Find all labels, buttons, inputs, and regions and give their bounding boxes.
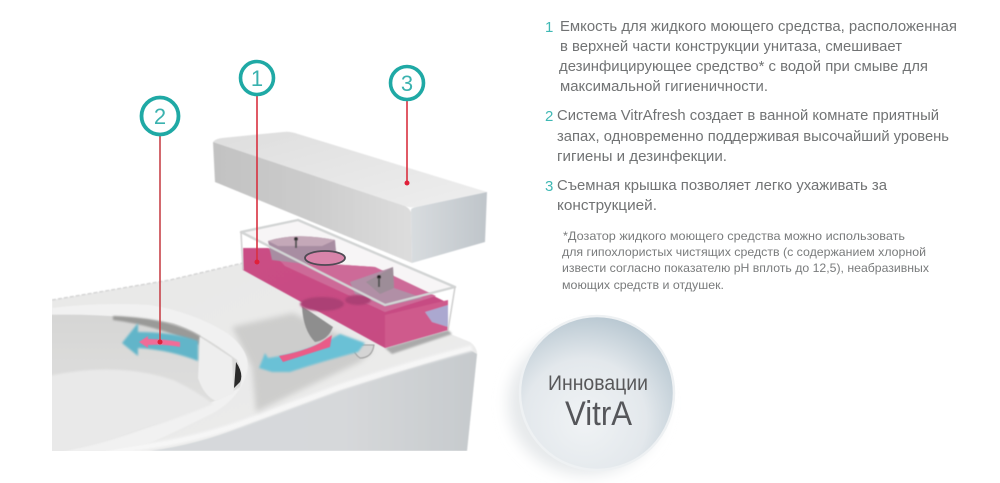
flush recess (232, 313, 373, 412)
item 3 text: Съемная крышка позволяет легко ухаживать за (557, 178, 888, 194)
callout 1 (240, 62, 274, 264)
glass tank (241, 220, 455, 354)
right pink arrow (279, 335, 332, 362)
item 2 text (545, 108, 949, 165)
rim shadow (113, 316, 200, 345)
item 1 text: максимальной гигиеничности. (560, 79, 768, 95)
badge: Инновации VitrA (508, 316, 674, 475)
pink liquid (243, 248, 448, 348)
funnel (302, 306, 333, 342)
item 3 text: 3 (545, 178, 553, 195)
badge shadow (508, 331, 664, 475)
toilet bowl (52, 314, 242, 402)
footnote: для гипохлористых чистящих средств (с содержанием хлорной (562, 245, 926, 259)
outlet pipe (352, 345, 374, 358)
right blue arrow (259, 334, 365, 372)
callout 2 (142, 98, 178, 344)
toilet body (52, 263, 477, 451)
black gap (234, 362, 241, 388)
lid front (213, 142, 412, 263)
callout 3: 3 (401, 71, 413, 96)
badge disc (520, 316, 674, 470)
white flush block (198, 337, 234, 401)
callout 3 (390, 66, 424, 186)
footnote: извести согласно показателю pH вплоть до 12,5), неабразивных (562, 261, 929, 275)
item 2 text: гигиены и дезинфекции. (557, 149, 727, 165)
second dispenser unit (350, 267, 423, 306)
lid top (213, 132, 487, 207)
dispenser top unit (268, 236, 337, 264)
left blue arrow (122, 323, 198, 361)
ring (305, 251, 345, 265)
bowl water (52, 370, 208, 416)
footnote: моющих средств и отдушек. (562, 278, 724, 292)
item 1 text: Емкость для жидкого моющего средства, расположенная (560, 19, 957, 35)
callout 1: 1 (251, 66, 263, 91)
item 3 text: конструкцией. (557, 198, 657, 214)
item 1 text (545, 19, 957, 95)
item 2 text: Система VitrAfresh создает в ванной комнате приятный (557, 108, 939, 124)
item 3 text (545, 178, 888, 214)
item 1 text: в верхней части конструкции унитаза, смешивает (560, 39, 902, 55)
item 2 text: 2 (545, 108, 553, 125)
footnote (562, 229, 929, 292)
lid (213, 132, 487, 263)
toilet rim (53, 305, 248, 368)
badge text: Инновации (548, 372, 648, 395)
badge: Инновации VitrA: VitrA (565, 395, 632, 433)
item 1 text: 1 (545, 19, 553, 36)
item 2 text: запах, одновременно поддерживая высочайший уровень (557, 129, 949, 145)
footnote: *Дозатор жидкого моющего средства можно использовать (563, 229, 905, 243)
callout 2: 2 (154, 104, 166, 129)
lid side (411, 192, 487, 263)
toilet illustration (40, 263, 477, 451)
shadow on deck (385, 330, 452, 354)
left pink arrow (139, 336, 180, 348)
submerged shadows (300, 297, 344, 311)
glass edges (241, 220, 455, 330)
glass back (241, 220, 455, 305)
item 1 text: дезинфицирующее средство* с водой при смыве для (559, 59, 928, 75)
